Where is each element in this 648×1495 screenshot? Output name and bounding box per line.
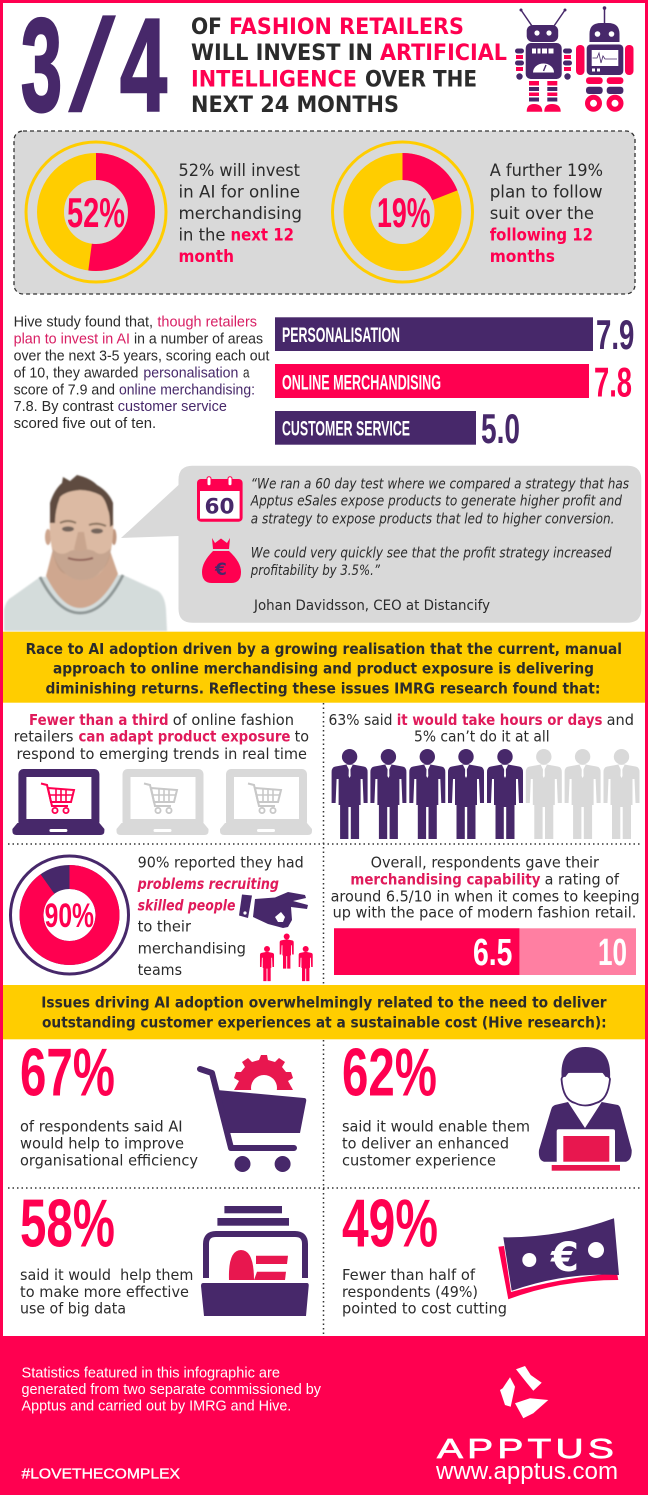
title: WILL INVEST IN: [191, 41, 373, 66]
attribution: Johan Davidsson, CEO at Distancify: [253, 598, 491, 614]
text: 58% description: to make more effective: [20, 1283, 189, 1301]
text: overall rating: up with the pace of modern fashion retail.: [333, 904, 636, 922]
icon: calendar 60: [197, 477, 243, 522]
bar: personalisation 7.9: [275, 311, 634, 358]
text block: Hive study: personalisation: [143, 365, 238, 381]
stat: 67%: 67%: [20, 1035, 115, 1111]
bar: online merchandising 7.8: ONLINE MERCHANDISING: [282, 372, 441, 394]
text: 19% follow: months: [490, 247, 555, 267]
text: 63% said: 5% can’t do it at all: [414, 728, 550, 746]
panel: product exposure: [12, 711, 312, 835]
banner: race to AI adoption: [3, 632, 645, 703]
panel: hours or days: [328, 711, 640, 839]
quote text: [250, 476, 629, 579]
text: overall rating: merchandising capability: [350, 870, 541, 888]
text block: Hive study: 7.8. By contrast: [14, 399, 114, 415]
bar: customer service 5.0: 5.0: [481, 405, 520, 452]
footer note: generated from two separate commissioned by: [22, 1381, 321, 1398]
panel: merchandising capability: [331, 853, 640, 975]
text: 49% description: pointed to cost cutting: [342, 1300, 507, 1318]
text: 90% reported: [137, 853, 304, 979]
title: [191, 15, 507, 118]
icon: purple robot with gauge: [515, 8, 572, 112]
text block: Hive study: [14, 315, 269, 432]
text: 67% description: would help to improve: [20, 1135, 184, 1153]
text: 90% reported: 90% reported they had: [138, 853, 304, 871]
title: FASHION RETAILERS: [229, 15, 464, 40]
text: 52% invest: in the: [178, 226, 226, 246]
logo mark: [500, 1366, 548, 1418]
text: overall rating: a rating of: [545, 870, 620, 888]
bar chart: 6.5 of 10: 6.5: [473, 932, 512, 974]
title: INTELLIGENCE: [191, 68, 357, 92]
banner: issues driving AI adoption: [3, 985, 645, 1039]
text: 19% follow: A further 19%: [490, 161, 603, 181]
text: 52% invest: next 12: [230, 226, 294, 246]
portrait: Johan Davidsson: [4, 475, 167, 631]
text block: Hive study: scored five out of ten.: [14, 416, 156, 432]
donut chart: 52%: [26, 142, 166, 282]
text: fewer than a third: retailers: [14, 728, 74, 746]
icon: calendar 60: 60: [204, 494, 234, 518]
icon: euro banknote: [498, 1218, 619, 1299]
stat: 49%: 49%: [342, 1186, 438, 1262]
text: 52% invest: merchandising: [178, 204, 302, 224]
text: 58% description: use of big data: [20, 1300, 126, 1318]
footer: [0, 1336, 648, 1495]
text: 62% description: said it would enable them: [342, 1118, 530, 1136]
icon: money bag: [202, 538, 241, 583]
text: fewer than a third: [14, 711, 309, 763]
text: 52% invest: month: [178, 247, 234, 267]
stat: 62%: 62%: [342, 1035, 437, 1111]
icon: laptop inactive: [116, 769, 208, 835]
text: overall rating: [331, 853, 640, 922]
text: fewer than a third: respond to emerging trends in real time: [16, 745, 307, 763]
hashtag: #LOVETHECOMPLEX: [22, 1465, 180, 1482]
text: 49% description: [342, 1266, 507, 1318]
icon: three team members: [260, 934, 313, 981]
text block: Hive study: plan to invest in AI: [14, 332, 130, 348]
bar: customer service 5.0: [275, 405, 520, 452]
wordmark: APPTUS: APPTUS: [437, 1433, 618, 1464]
text: overall rating: Overall, respondents gave their: [371, 853, 600, 871]
text block: Hive study: score of 7.9 and: [14, 382, 115, 398]
callout: customer quote: [121, 466, 641, 623]
bar chart: 6.5 of 10: 10: [598, 932, 627, 974]
text block: Hive study: Hive study found that,: [14, 315, 153, 331]
text: 63% said: [328, 711, 634, 746]
text: 19% follow: suit over the: [490, 204, 594, 224]
text: fewer than a third: can adapt product exposure: [78, 728, 290, 746]
text block: Hive study: of 10, they awarded: [14, 365, 138, 381]
panel: recruiting: [10, 853, 313, 981]
panel: 49% cost cutting: [342, 1186, 619, 1318]
icon: laptop inactive: [220, 769, 312, 835]
icon: laptop active: [12, 769, 104, 835]
title: OF: [191, 15, 222, 40]
stat: 58%: 58%: [20, 1186, 115, 1262]
text: 49% description: respondents (49%): [342, 1283, 478, 1301]
donut chart: 19%: [332, 142, 472, 282]
panel: 67% efficiency: [20, 1035, 306, 1172]
donut chart: 19%: 19%: [377, 189, 431, 236]
icon: person at laptop: [539, 1047, 632, 1171]
bar: personalisation 7.9: PERSONALISATION: [282, 324, 400, 347]
text: 19% follow: following 12: [490, 226, 593, 246]
text: 90% reported: skilled people: [138, 897, 236, 915]
icon: shopping cart with gear: [200, 1055, 306, 1172]
text: 52% invest: [178, 161, 302, 267]
bar: customer service 5.0: CUSTOMER SERVICE: [282, 418, 410, 440]
website url: www.apptus.com: [435, 1458, 618, 1485]
text: 63% said: 63% said: [328, 711, 392, 729]
text: fewer than a third: Fewer than a third: [29, 711, 169, 729]
text: 90% reported: merchandising: [138, 939, 246, 957]
text block: Hive study: though retailers: [157, 315, 257, 331]
text: 49% description: Fewer than half of: [342, 1266, 476, 1284]
text block: Hive study: online merchandising:: [119, 382, 255, 398]
text: 52% invest: in AI for online: [178, 182, 300, 202]
bar chart: 6.5 of 10: [334, 928, 636, 975]
panel: 62% customer experience: [342, 1035, 632, 1171]
text: 19% follow: [490, 161, 603, 267]
text: 58% description: said it would help them: [20, 1266, 193, 1284]
title: OVER THE: [365, 68, 477, 92]
footer note: Apptus and carried out by IMRG and Hive.: [22, 1397, 291, 1414]
text: 63% said: it would take hours or days: [397, 711, 603, 729]
donut chart: 90%: [10, 856, 128, 974]
text: 52% invest: 52% will invest: [178, 161, 300, 181]
panel: 58% big data: [20, 1186, 309, 1318]
text: 63% said: and: [607, 711, 634, 729]
text block: Hive study: customer service: [118, 399, 227, 415]
banner: race to AI adoption: diminishing returns. Reflecting these issues IMRG research found that:: [46, 679, 600, 697]
text: 62% description: [342, 1118, 530, 1169]
big figure: 3/4: [21, 0, 167, 139]
text: 58% description: [20, 1266, 193, 1318]
text: fewer than a third: of online fashion: [173, 711, 294, 729]
icon: money bag: €: [214, 560, 227, 580]
icon row: business people: [332, 749, 640, 839]
icon: robot with heart monitor: [576, 6, 634, 109]
panel: AI investment donuts: [14, 131, 635, 294]
text: 90% reported: teams: [138, 961, 182, 979]
text: 90% reported: problems recruiting: [137, 875, 279, 893]
text block: Hive study: a: [243, 365, 250, 381]
text: fewer than a third: to: [295, 728, 309, 746]
quote text: profitability by 3.5%.”: [250, 563, 380, 579]
text block: Hive study: over the next 3-5 years, scoring each out: [14, 348, 269, 364]
icon: hand picking person: [239, 892, 308, 928]
text: 67% description: [20, 1118, 198, 1169]
footer note: Statistics featured in this infographic are: [22, 1364, 280, 1381]
bar chart: AI investment scores: [275, 311, 634, 452]
dotted dividers: [8, 703, 640, 1336]
banner: race to AI adoption: approach to online merchandising and product exposure is delivering: [53, 660, 594, 678]
donut chart: 52%: 52%: [67, 189, 125, 236]
text: 67% description: organisational efficiency: [20, 1151, 198, 1169]
text: 62% description: to deliver an enhanced: [342, 1135, 509, 1153]
title: ARTIFICIAL: [380, 41, 507, 66]
text: 62% description: customer experience: [342, 1151, 496, 1169]
bar: online merchandising 7.8: [275, 359, 632, 406]
text: 90% reported: to their: [138, 918, 192, 936]
title: NEXT 24 MONTHS: [191, 93, 399, 118]
donut chart: 90%: 90%: [45, 897, 94, 935]
text: 19% follow: plan to follow: [490, 182, 603, 202]
footer note: [22, 1364, 321, 1414]
icon: data file drawer: [201, 1206, 309, 1316]
text block: Hive study: in a number of areas: [134, 332, 263, 348]
text: overall rating: around 6.5/10 in when it comes to keeping: [331, 887, 640, 905]
text: 67% description: of respondents said AI: [20, 1118, 183, 1136]
icon: euro banknote: €: [550, 1235, 579, 1281]
